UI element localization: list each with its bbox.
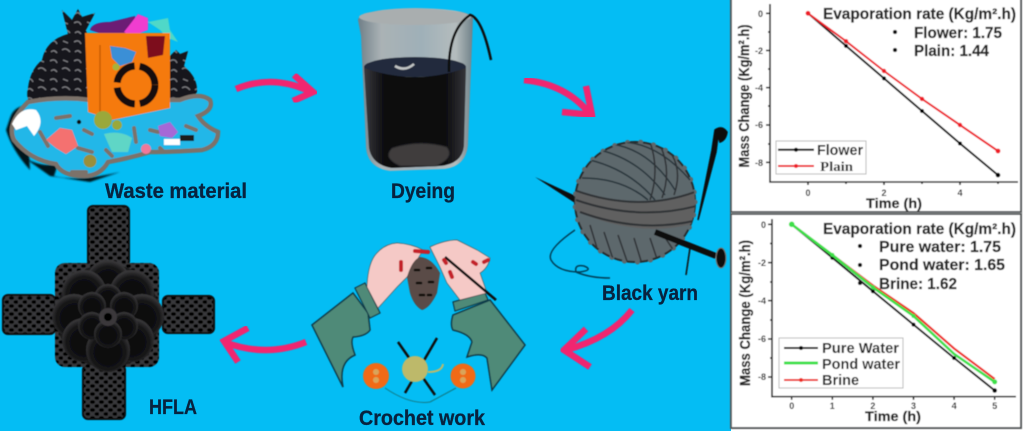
left hand [367, 243, 423, 308]
arrow: waste to dyeing [236, 75, 313, 101]
x tick labels [789, 401, 997, 411]
legend: Pond water [822, 357, 900, 373]
right hand [430, 240, 490, 300]
panel: flower vs plain evaporation chart [731, 0, 1021, 212]
y tick labels: -2 [755, 46, 763, 56]
yarn and needles [398, 338, 437, 395]
legend: Plain [820, 160, 853, 175]
evaporation rates: Pure water: 1.75 [879, 239, 1001, 256]
brine series [792, 224, 995, 379]
x tick labels: 2 [881, 188, 887, 198]
label: HFLA: HFLA [149, 396, 197, 419]
arrow: dyeing to yarn [524, 80, 592, 115]
evaporation rates: Flower: 1.75 [914, 25, 1002, 42]
x tick labels: 4 [952, 401, 957, 411]
x tick labels: 0 [789, 401, 794, 411]
y tick labels: -4 [755, 83, 763, 93]
x tick labels: 1 [830, 401, 835, 411]
legend: Brine [822, 373, 859, 389]
left sleeve [312, 293, 370, 387]
pond water series [789, 222, 997, 384]
arrow: yarn to crochet [564, 310, 632, 367]
axis titles: Time (h) [866, 195, 922, 211]
y tick labels: -6 [758, 334, 766, 344]
evaporation rates: Evaporation rate (Kg/m².h) [823, 6, 1016, 23]
icon: HFLA flower absorber [3, 206, 214, 419]
x tick labels [805, 188, 963, 198]
y tick labels [758, 220, 766, 382]
legend [776, 141, 866, 175]
puddle of waste [6, 96, 218, 182]
buttons [363, 363, 389, 389]
icon: beaker with dye [358, 8, 491, 171]
y tick labels: -2 [758, 258, 766, 268]
label: waste material: Waste material [105, 180, 247, 203]
evaporation rates [823, 6, 1016, 60]
axis titles [736, 24, 922, 211]
y tick labels: -8 [755, 158, 763, 168]
y tick labels: -8 [758, 372, 766, 382]
label: black yarn: Black yarn [602, 282, 698, 305]
y tick labels: -6 [755, 120, 763, 130]
x tick labels: 3 [911, 401, 916, 411]
label: crochet work: Crochet work [359, 407, 485, 430]
x tick labels: 0 [805, 188, 811, 198]
pure water series [792, 224, 997, 393]
background [0, 0, 731, 431]
crochet piece [407, 257, 440, 310]
right sleeve [452, 300, 525, 390]
label: dyeing: Dyeing [391, 180, 455, 203]
y tick labels: 0 [761, 220, 766, 230]
black garbage bags [27, 9, 197, 110]
legend: Pure Water [822, 341, 899, 357]
legend: Flower [817, 143, 863, 159]
axis titles [737, 240, 921, 424]
y tick labels: -4 [758, 296, 766, 306]
evaporation rates [823, 221, 1016, 293]
clothes in bin [90, 14, 178, 42]
orange recycling bin [85, 33, 170, 120]
icon: waste material pile [6, 9, 218, 182]
evaporation rates: Brine: 1.62 [879, 276, 957, 293]
panel: water type evaporation chart [731, 214, 1021, 428]
x tick labels: 2 [870, 401, 875, 411]
axis titles: Time (h) [865, 408, 921, 424]
icon: crochet work [312, 240, 525, 402]
plain series [806, 11, 1000, 153]
y tick labels: 0 [758, 9, 763, 19]
legend [779, 338, 903, 389]
axis titles: Mass Change (Kg/m².h) [736, 24, 753, 168]
arrow: crochet to HFLA [224, 328, 306, 362]
evaporation rates: Pond water: 1.65 [879, 257, 1005, 274]
flower series [808, 13, 1000, 177]
y tick labels [755, 9, 763, 168]
evaporation rates: Plain: 1.44 [914, 43, 989, 60]
axis titles: Mass Change (Kg/m².h) [737, 240, 754, 386]
evaporation rates: Evaporation rate (Kg/m².h) [823, 221, 1016, 238]
x tick labels: 4 [957, 188, 963, 198]
x tick labels: 5 [992, 401, 997, 411]
icon: black yarn ball with needles [535, 128, 727, 278]
